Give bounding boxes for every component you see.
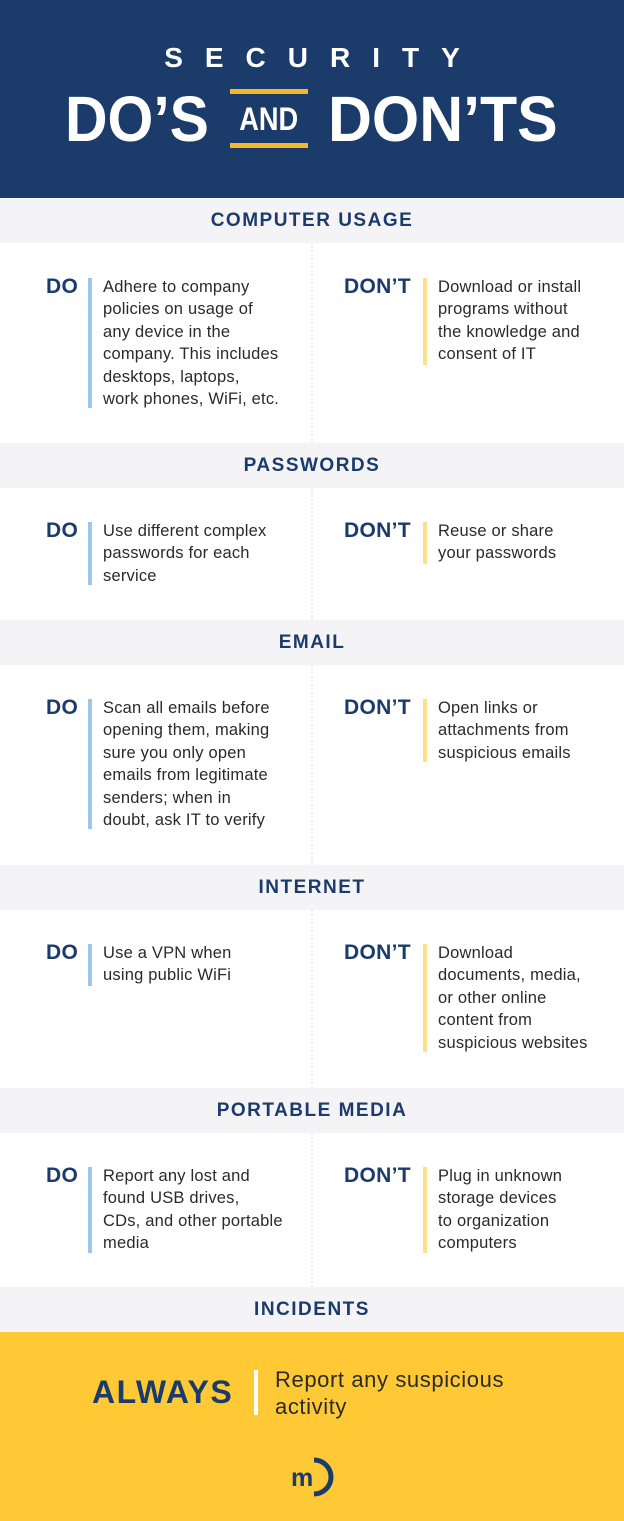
do: computer usage: work phones, WiFi, etc. [103, 390, 279, 408]
do: internet: using public WiFi [103, 966, 231, 984]
do: portable media: found USB drives, [103, 1189, 239, 1207]
header banner [0, 0, 624, 198]
don't: email: DON’T [344, 696, 411, 719]
don't: portable media: to organization [438, 1212, 549, 1230]
don't: computer usage: DON’T [344, 275, 411, 298]
don't: portable media [344, 1164, 562, 1253]
always text: activity [275, 1394, 347, 1419]
don't: computer usage: programs without [438, 300, 568, 318]
do: passwords: passwords for each [103, 544, 250, 562]
title: do's and don'ts [65, 83, 558, 155]
don't: internet: content from [438, 1011, 532, 1029]
don't: passwords: DON’T [344, 519, 411, 542]
section: passwords: PASSWORDS [244, 455, 380, 476]
section: portable media: PORTABLE MEDIA [217, 1100, 407, 1121]
do: email [46, 696, 270, 829]
title: do's and don'ts: AND [240, 101, 298, 137]
do: portable media: media [103, 1234, 149, 1252]
always text: Report any suspicious [275, 1367, 504, 1392]
do: email: senders; when in [103, 789, 231, 807]
do: email: DO [46, 696, 78, 719]
don't: computer usage: Download or install [438, 278, 581, 296]
don't: computer usage: consent of IT [438, 345, 536, 363]
don't: internet: or other online [438, 989, 546, 1007]
do: computer usage: policies on usage of [103, 300, 253, 318]
section: incidents: INCIDENTS [254, 1299, 370, 1320]
do: computer usage: desktops, laptops, [103, 368, 240, 386]
section: email: EMAIL [279, 632, 345, 653]
section: passwords [0, 443, 624, 488]
do: portable media: CDs, and other portable [103, 1212, 283, 1230]
do: email: Scan all emails before [103, 699, 270, 717]
do: portable media [46, 1164, 283, 1253]
do: internet: DO [46, 941, 78, 964]
do: computer usage: any device in the [103, 323, 230, 341]
don't: email [344, 696, 571, 762]
don't: portable media: Plug in unknown [438, 1167, 562, 1185]
do: email: sure you only open [103, 744, 246, 762]
don't: internet: Download [438, 944, 513, 962]
do: passwords: Use different complex [103, 522, 266, 540]
title: security: SECURITY [164, 42, 482, 73]
don't: internet: documents, media, [438, 966, 581, 984]
section: email [0, 620, 624, 665]
do: computer usage: company. This includes [103, 345, 278, 363]
don't: passwords: Reuse or share [438, 522, 554, 540]
do: passwords: service [103, 567, 157, 585]
do: computer usage: Adhere to company [103, 278, 250, 296]
do: email: opening them, making [103, 721, 269, 739]
always label: ALWAYS [92, 1374, 233, 1410]
don't: email: suspicious emails [438, 744, 571, 762]
title: do's and don'ts: DON’TS [328, 83, 558, 155]
do: passwords [46, 519, 266, 585]
don't: portable media: computers [438, 1234, 517, 1252]
don't: portable media: DON’T [344, 1164, 411, 1187]
don't: passwords: your passwords [438, 544, 556, 562]
section: incidents [0, 1287, 624, 1332]
don't: email: attachments from [438, 721, 569, 739]
do: computer usage [46, 275, 279, 408]
section: portable media [0, 1088, 624, 1133]
incidents panel [0, 1332, 624, 1521]
do: passwords: DO [46, 519, 78, 542]
do: internet: Use a VPN when [103, 944, 231, 962]
do: internet [46, 941, 231, 986]
do: email: emails from legitimate [103, 766, 268, 784]
section: internet: INTERNET [258, 877, 366, 898]
don't: portable media: storage devices [438, 1189, 557, 1207]
don't: internet: DON’T [344, 941, 411, 964]
do: computer usage: DO [46, 275, 78, 298]
logo: m [291, 1464, 313, 1492]
don't: computer usage [344, 275, 581, 365]
don't: internet: suspicious websites [438, 1034, 588, 1052]
do: portable media: DO [46, 1164, 78, 1187]
section: computer usage [0, 198, 624, 243]
title: do's and don'ts: DO’S [65, 83, 209, 155]
text: doubt, ask IT to verify [103, 811, 265, 829]
don't: computer usage: the knowledge and [438, 323, 580, 341]
section: computer usage: COMPUTER USAGE [211, 210, 413, 231]
section: internet [0, 865, 624, 910]
don't: passwords [344, 519, 556, 564]
don't: email: Open links or [438, 699, 538, 717]
don't: internet [344, 941, 588, 1052]
always text [275, 1367, 504, 1419]
do: portable media: Report any lost and [103, 1167, 250, 1185]
logo [291, 1458, 334, 1496]
